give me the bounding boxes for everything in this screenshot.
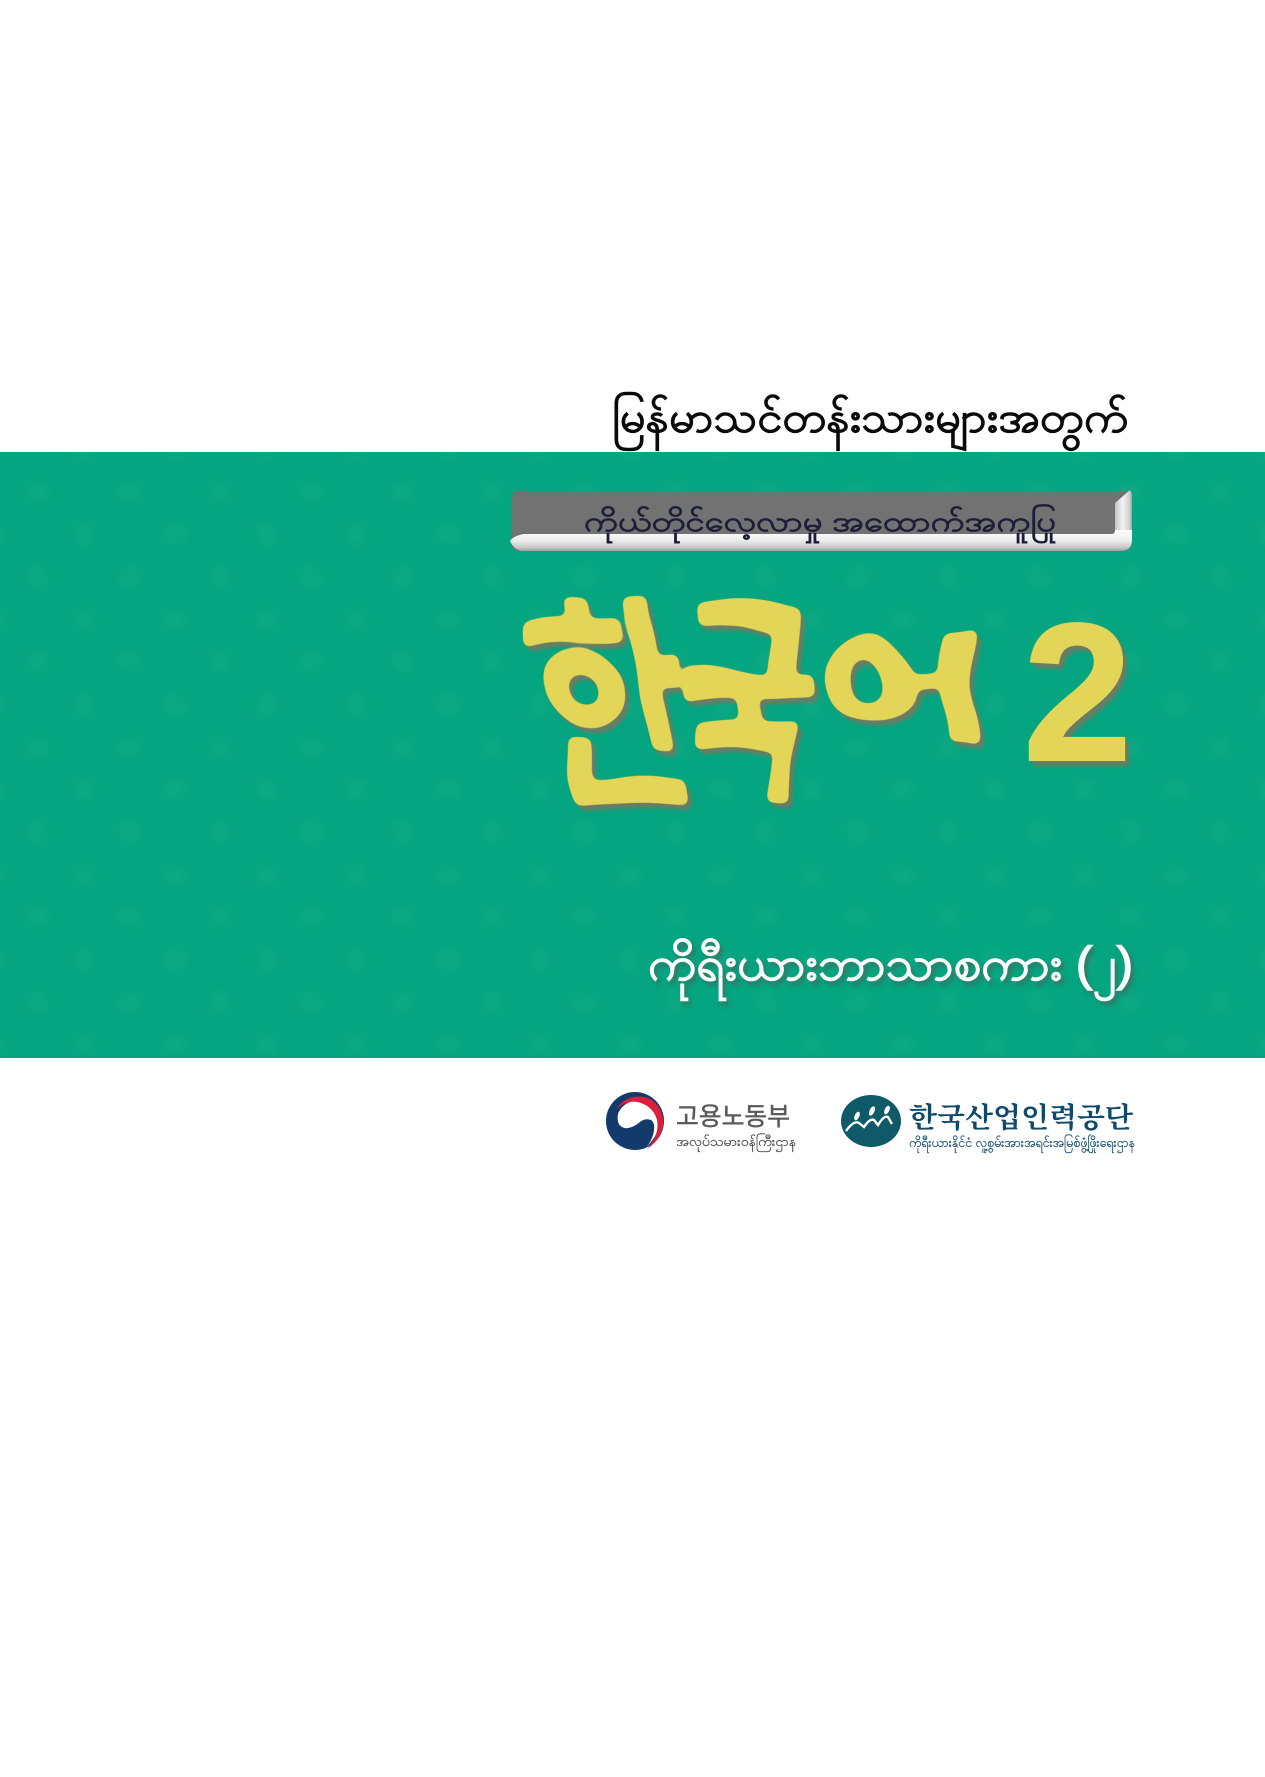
- logo: HRD Korea: [841, 1095, 1135, 1153]
- icon: people emblem: [841, 1095, 901, 1147]
- hangul word, warped to a brush look: [513, 581, 989, 835]
- hangul word, warped to a brush look: 어: [814, 622, 989, 765]
- agency name: 한국산업인력공단: [909, 1096, 1134, 1136]
- logo: Ministry of Employment and Labor: [606, 1092, 796, 1152]
- plaque bottom bevel: [510, 530, 1132, 551]
- ministry name in Burmese: အလုပ်သမားဝန်ကြီးဌာန: [676, 1133, 796, 1152]
- numeral 2: 2: [1023, 583, 1132, 802]
- plaque body: [512, 491, 1130, 551]
- ministry name: 고용노동부: [676, 1103, 790, 1131]
- top title: for Myanmar trainees: မြန်မာသင်တန်းသားများအတွက်: [612, 392, 1128, 452]
- subtitle: Korean language (2): ကိုရီးယားဘာသာစကား (၂): [648, 937, 1133, 1001]
- plaque right bevel: [1115, 490, 1132, 540]
- plaque: self-study aid: [510, 490, 1132, 551]
- hangul word, warped to a brush look: 한: [513, 582, 710, 835]
- icon: taegeuk emblem: [606, 1092, 664, 1150]
- main title: Korean 2: [513, 581, 1132, 835]
- hangul word, warped to a brush look: 국: [680, 581, 812, 827]
- agency name in Burmese: ကိုရီးယားနိုင်ငံ လူ့စွမ်းအားအရင်းအမြစ်ဖွံ့ဖြိုးရေးဌာန: [909, 1134, 1135, 1153]
- plaque text: ကိုယ်တိုင်လေ့လာမှု အထောက်အကူပြု: [584, 503, 1056, 544]
- green cover band: [0, 452, 1265, 1058]
